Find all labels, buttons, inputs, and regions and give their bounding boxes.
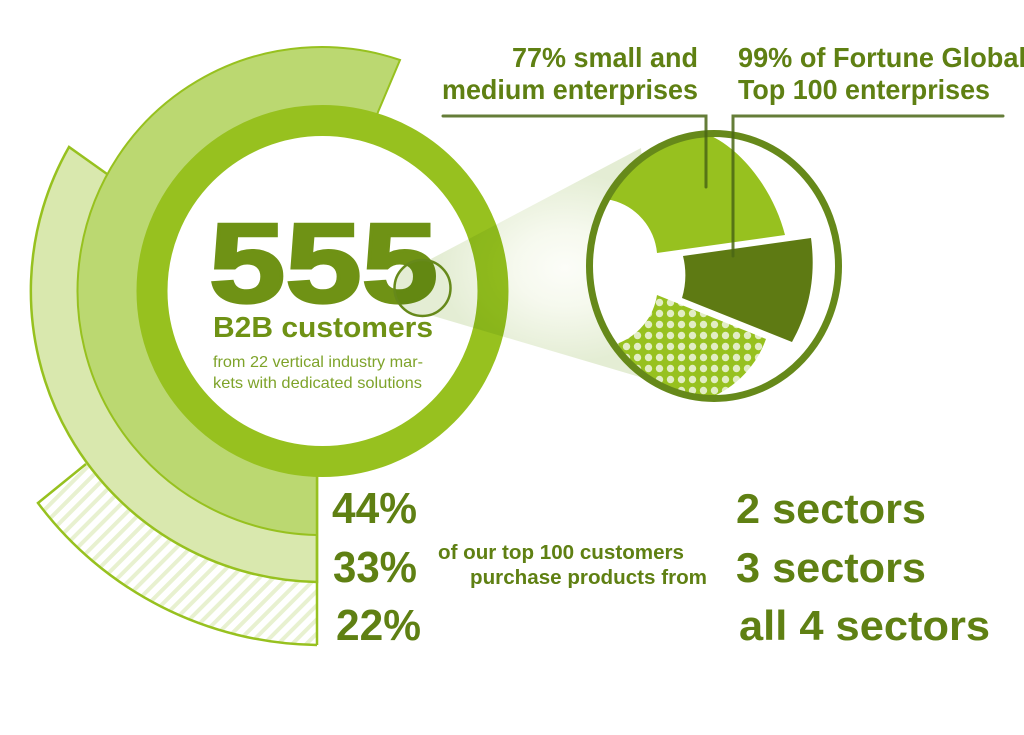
label: 77% small and medium enterprises — [442, 42, 698, 105]
label: 77% small and medium enterprises: medium enterprises — [442, 74, 698, 105]
pie background — [590, 134, 838, 398]
axis line under the arcs — [316, 476, 318, 645]
central ring — [152, 120, 493, 462]
description text — [213, 354, 423, 392]
label: 2 sectors: 2 sectors — [736, 485, 926, 532]
description text: kets with dedicated solutions — [213, 375, 422, 392]
pie outline — [590, 134, 838, 398]
sector arc: 44% — [78, 47, 400, 535]
pie slice: 99% of Fortune Global Top 100 — [682, 238, 813, 342]
label: 77% small and medium enterprises: 77% small and — [512, 42, 698, 73]
label: 99% of Fortune Global Top 100 enterprises: Top 100 enterprises — [738, 74, 990, 105]
sector arc: 22% hatched — [38, 291, 322, 645]
sector arc: 33% — [31, 147, 322, 582]
label: all 4 sectors: all 4 sectors — [739, 602, 990, 649]
description text: from 22 vertical industry mar- — [213, 354, 423, 371]
caption: of our top 100 customers purchase products from: purchase products from — [470, 567, 707, 589]
label: 3 sectors: 3 sectors — [736, 544, 926, 591]
stat: 44%: 44% — [332, 484, 417, 533]
pie chart — [590, 134, 838, 398]
pie slice: 77% small and medium enterprises — [608, 134, 785, 253]
stat: 22%: 22% — [336, 601, 421, 650]
magnifier cone — [395, 148, 660, 383]
caption: of our top 100 customers purchase products from: of our top 100 customers — [438, 542, 684, 564]
label: 99% of Fortune Global Top 100 enterprises — [738, 42, 1024, 105]
heading: B2B customers: B2B customers — [213, 312, 433, 344]
leader line: Fortune Global Top 100 — [733, 116, 1003, 256]
headline number: 555 — [209, 200, 438, 326]
magnifier small circle — [394, 260, 450, 316]
pie slice: dotted — [616, 295, 766, 397]
leader line: small and medium enterprises — [443, 116, 706, 187]
caption: of our top 100 customers purchase products from — [438, 542, 707, 589]
stat: 33%: 33% — [333, 543, 417, 592]
